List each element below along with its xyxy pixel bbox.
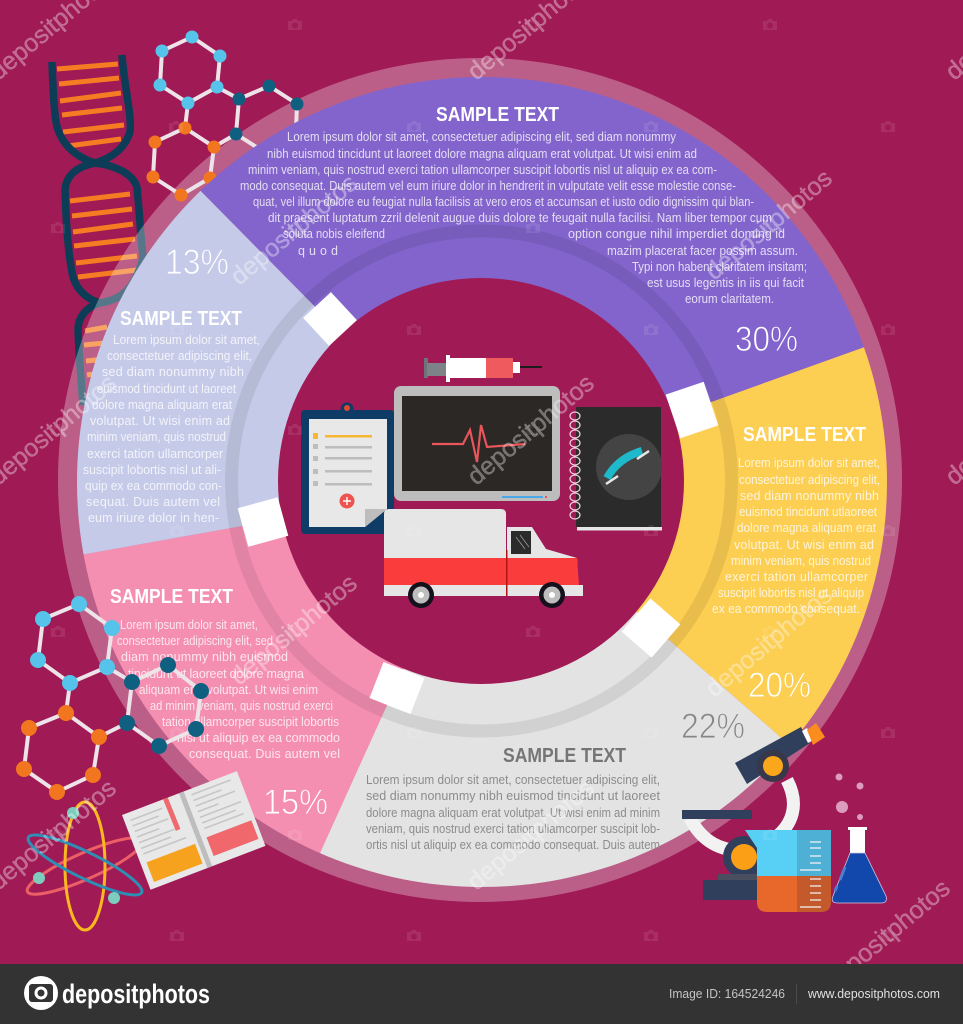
icon: open book bbox=[122, 771, 265, 890]
wedge: lavender 13% bbox=[77, 191, 334, 554]
percent 30: 30% bbox=[735, 320, 798, 359]
body text: Typi non habent claritatem insitam; bbox=[632, 260, 807, 274]
body text: Lorem ipsum dolor sit amet, consectetuer adipiscing elit, bbox=[366, 773, 660, 787]
body text: consectetuer adipiscing elit, bbox=[739, 473, 880, 487]
heading: SAMPLE TEXT bbox=[503, 745, 626, 767]
watermark text: depositphotos bbox=[225, 169, 363, 291]
watermark text: depositphotos bbox=[462, 369, 600, 491]
body text: exerci tation ullamcorper bbox=[87, 447, 223, 461]
icon: ambulance bbox=[384, 509, 583, 608]
percent 22: 22% bbox=[681, 707, 745, 746]
body text: sequat. Duis autem vel bbox=[86, 495, 220, 509]
body text: Lorem ipsum dolor sit amet, consectetuer adipiscing elit, sed diam nonummy bbox=[287, 130, 677, 144]
body text: Lorem ipsum dolor sit amet, bbox=[113, 333, 260, 347]
icon: clipboard bbox=[301, 402, 394, 534]
centre hole bbox=[278, 278, 684, 684]
watermark text: depositphotos bbox=[818, 874, 956, 996]
icon: phone notebook bbox=[570, 407, 662, 530]
heading: SAMPLE TEXT bbox=[120, 308, 242, 330]
body text: quip ex ea commodo con- bbox=[85, 479, 222, 493]
body text: q u o d bbox=[298, 244, 338, 258]
body text: consectetuer adipiscing elit, sed bbox=[117, 634, 273, 648]
body text: nisl ut aliquip ex ea commodo bbox=[177, 731, 340, 745]
body text: euismod tincidunt ut laoreet bbox=[97, 382, 236, 396]
panel: yellow text bbox=[712, 424, 880, 705]
body text: sed diam nonummy nibh bbox=[102, 365, 244, 379]
body text: aliquam erat volutpat. Ut wisi enim bbox=[139, 683, 318, 697]
body text: eum iriure dolor in hen- bbox=[88, 511, 219, 525]
watermark text: depositphotos bbox=[700, 164, 838, 286]
wedge: grey 22% bbox=[320, 612, 782, 887]
body text: Lorem ipsum dolor sit amet, bbox=[738, 456, 880, 470]
icon: flask with bubbles bbox=[832, 774, 886, 903]
watermark text: depositphotos bbox=[462, 774, 600, 896]
body text: veniam, quis nostrud exerci tation ullamcorper suscipit lob- bbox=[366, 822, 660, 836]
body text: suscipit lobortis nisl ut aliquip bbox=[718, 586, 864, 600]
body text: sed diam nonummy nibh bbox=[740, 489, 879, 503]
wedge: yellow 20% bbox=[636, 347, 887, 738]
wedge: purple 30% bbox=[200, 77, 864, 407]
body text: minim veniam, quis nostrud bbox=[731, 554, 871, 568]
body text: Lorem ipsum dolor sit amet, bbox=[120, 618, 258, 632]
body text: ex ea commodo consequat. bbox=[712, 602, 860, 616]
panel: lavender text bbox=[83, 243, 260, 525]
body text bbox=[83, 333, 260, 525]
image id: Image ID: 164524246 bbox=[669, 987, 785, 1001]
pie chart bbox=[77, 77, 887, 887]
body text: volutpat. Ut wisi enim ad bbox=[90, 414, 230, 428]
icon: atom bbox=[22, 802, 148, 930]
percent 20: 20% bbox=[748, 666, 811, 705]
body text: euismod tincidunt utlaoreet bbox=[739, 505, 877, 519]
body text: quat, vel illum dolore eu feugiat nulla facilisis at vero eros et accumsan et iusto odio dignissim qui blan- bbox=[253, 195, 754, 209]
watermark text: depositphotos bbox=[225, 569, 363, 691]
body text: nibh euismod tincidunt ut laoreet dolore magna aliquam erat volutpat. Ut wisi enim ad bbox=[267, 147, 697, 161]
body text: consectetuer adipiscing elit, bbox=[107, 349, 252, 363]
heading: SAMPLE TEXT bbox=[110, 586, 233, 608]
icon: microscope bbox=[682, 723, 825, 900]
body text: dolore magna aliquam erat bbox=[92, 398, 232, 412]
thin inner ring bbox=[232, 231, 732, 731]
outer translucent ring bbox=[58, 58, 902, 902]
body text bbox=[712, 456, 880, 616]
heading: SAMPLE TEXT bbox=[743, 424, 866, 446]
site url: www.depositphotos.com bbox=[807, 987, 940, 1001]
body text: sed diam nonummy nibh euismod tincidunt ut laoreet bbox=[366, 789, 661, 803]
body text: modo consequat. Duis autem vel eum iriure dolor in hendrerit in vulputate velit esse molestie conse- bbox=[240, 179, 736, 193]
body text: minim veniam, quis nostrud bbox=[87, 430, 226, 444]
body text: dit praesent luptatum zzril delenit augue duis dolore te feugait nulla facilisi. Nam liber tempor cum bbox=[268, 211, 772, 225]
body text: volutpat. Ut wisi enim ad bbox=[734, 538, 874, 552]
icon: syringe bbox=[424, 355, 542, 382]
body text: ortis nisl ut aliquip ex ea commodo consequat. Duis autem bbox=[366, 838, 660, 852]
body text bbox=[240, 130, 807, 306]
body text: dolore magna aliquam erat bbox=[737, 521, 876, 535]
body text: consequat. Duis autem vel bbox=[189, 747, 340, 761]
body text: mazim placerat facer possim assum. bbox=[607, 244, 798, 258]
body text: soluta nobis eleifend bbox=[283, 227, 385, 241]
body text: tation ullamcorper suscipit lobortis bbox=[162, 715, 339, 729]
body text: option congue nihil imperdiet doming id bbox=[568, 227, 785, 241]
panel: purple text bbox=[240, 104, 807, 359]
body text: diam nonummy nibh euismod bbox=[121, 650, 288, 664]
body text bbox=[117, 618, 340, 761]
body text: ad minim veniam, quis nostrud exerci bbox=[150, 699, 333, 713]
panel: pink text bbox=[110, 586, 340, 822]
icon: molecule top (partly behind the pie) bbox=[146, 30, 304, 202]
footer bar bbox=[0, 964, 963, 1024]
percent 13: 13% bbox=[165, 243, 229, 282]
body text: tincidunt ut laoreet dolore magna bbox=[128, 667, 304, 681]
footer logo bbox=[24, 976, 210, 1010]
body text: minim veniam, quis nostrud exerci tation ullamcorper suscipit lobortis nisl ut aliquip ex ea com- bbox=[248, 163, 717, 177]
percent 15: 15% bbox=[263, 783, 328, 822]
body text: dolore magna aliquam erat volutpat. Ut wisi enim ad minim bbox=[366, 806, 660, 820]
icon: dna helix bbox=[52, 55, 143, 405]
white separator blocks bbox=[243, 305, 711, 706]
wedge: pink 15% bbox=[84, 526, 404, 853]
icon: molecule lower left bbox=[16, 596, 209, 800]
body text: suscipit lobortis nisl ut ali- bbox=[83, 463, 221, 477]
body text: eorum claritatem. bbox=[685, 292, 774, 306]
icon: monitor bbox=[394, 386, 560, 501]
body text bbox=[366, 773, 661, 852]
icon: beaker bbox=[745, 830, 831, 912]
body text: est usus legentis in iis qui facit bbox=[647, 276, 804, 290]
body text: exerci tation ullamcorper bbox=[725, 570, 868, 584]
watermark text: depositphotos bbox=[700, 581, 838, 703]
heading: SAMPLE TEXT bbox=[436, 104, 559, 126]
panel: grey text bbox=[366, 707, 745, 852]
footer logo: depositphotos bbox=[62, 979, 210, 1009]
watermark camera marks bbox=[51, 19, 895, 941]
